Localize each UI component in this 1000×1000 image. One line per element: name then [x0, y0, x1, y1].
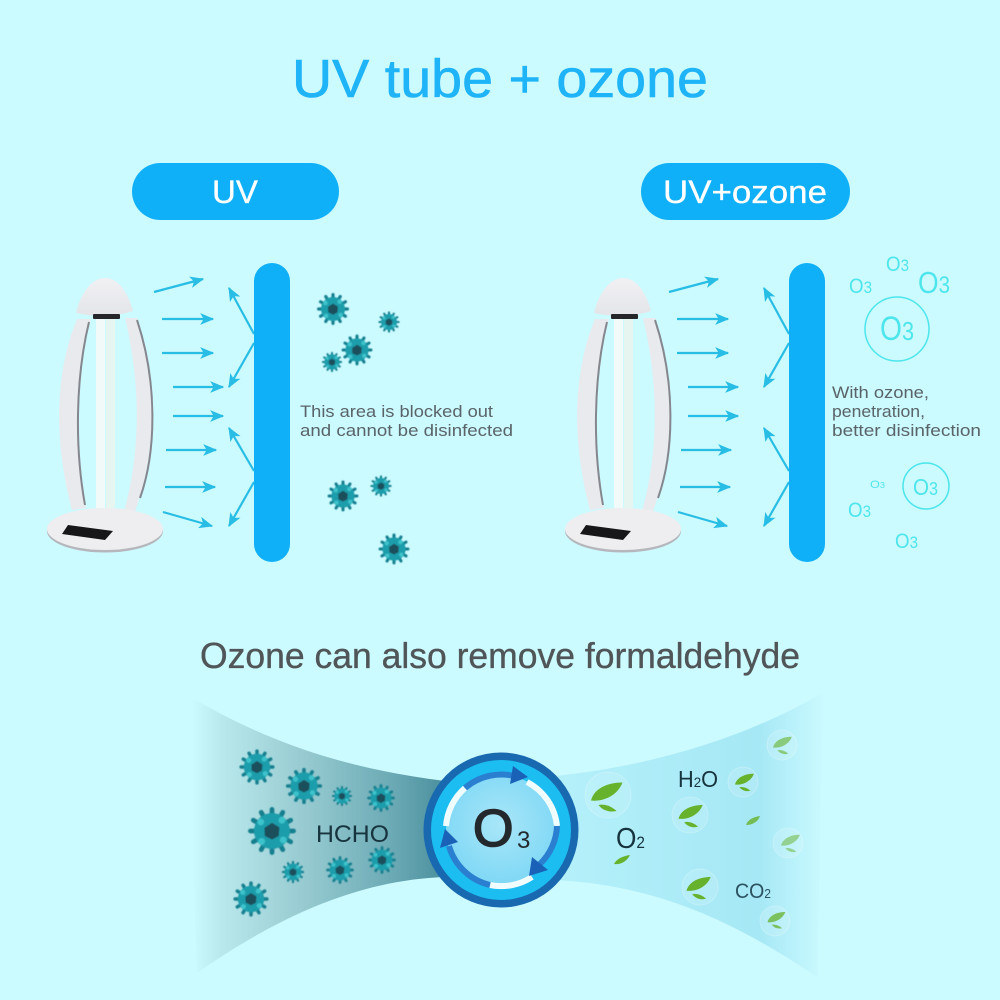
text: ozone penetration note: With ozone,	[832, 383, 929, 402]
text: ozone penetration note: better disinfection	[832, 421, 981, 440]
funnel: polluted air	[187, 695, 445, 973]
icons: viruses behind barrier	[319, 295, 408, 563]
icon: UV lamp	[47, 278, 163, 552]
pill heading: UV: UV	[212, 174, 259, 210]
ozone molecule labels: O3	[870, 479, 886, 491]
barrier	[254, 263, 290, 562]
text: blocked area note: This area is blocked out	[300, 402, 493, 421]
icons: leaf bubbles	[585, 730, 803, 936]
panel: UV plus ozone	[565, 253, 981, 562]
ozone molecule labels: O3	[886, 253, 909, 276]
ozone molecule labels: O3	[849, 275, 872, 298]
label: HCHO: HCHO	[316, 821, 389, 848]
label: H2O: H2O	[678, 766, 718, 792]
ozone molecule labels: O3	[918, 265, 950, 300]
ozone molecule labels: O3	[913, 474, 938, 500]
icon: O3 circle: O	[473, 800, 513, 858]
pill heading: UV+ozone	[641, 163, 850, 220]
icon: O3 circle: 3	[517, 827, 530, 854]
barrier	[789, 263, 825, 562]
diagram: ozone purification	[187, 693, 823, 977]
funnel: clean air	[555, 693, 823, 977]
heading: formaldehyde: Ozone can also remove formaldehyde	[200, 635, 800, 676]
text: ozone penetration note	[832, 383, 981, 440]
arrows: emitted UV rays	[154, 279, 254, 526]
ozone molecule labels	[848, 253, 950, 553]
title: UV tube + ozone	[292, 49, 708, 109]
pill heading: UV	[132, 163, 339, 220]
pill heading: UV+ozone: UV+ozone	[663, 174, 827, 210]
ozone molecule labels: O3	[880, 310, 914, 348]
icon: UV lamp	[565, 278, 681, 552]
arrows: emitted UV rays	[669, 279, 789, 526]
label: O2: O2	[616, 823, 645, 855]
panel: UV only	[47, 263, 513, 563]
icons: formaldehyde viruses	[235, 751, 394, 915]
icon: O3 circle	[424, 752, 578, 908]
ozone molecule labels: O3	[895, 530, 918, 553]
text: blocked area note: and cannot be disinfected	[300, 421, 513, 440]
label: CO2: CO2	[735, 880, 771, 903]
text: blocked area note	[300, 402, 513, 440]
text: ozone penetration note: penetration,	[832, 402, 925, 421]
ozone molecule labels: O3	[848, 499, 871, 522]
